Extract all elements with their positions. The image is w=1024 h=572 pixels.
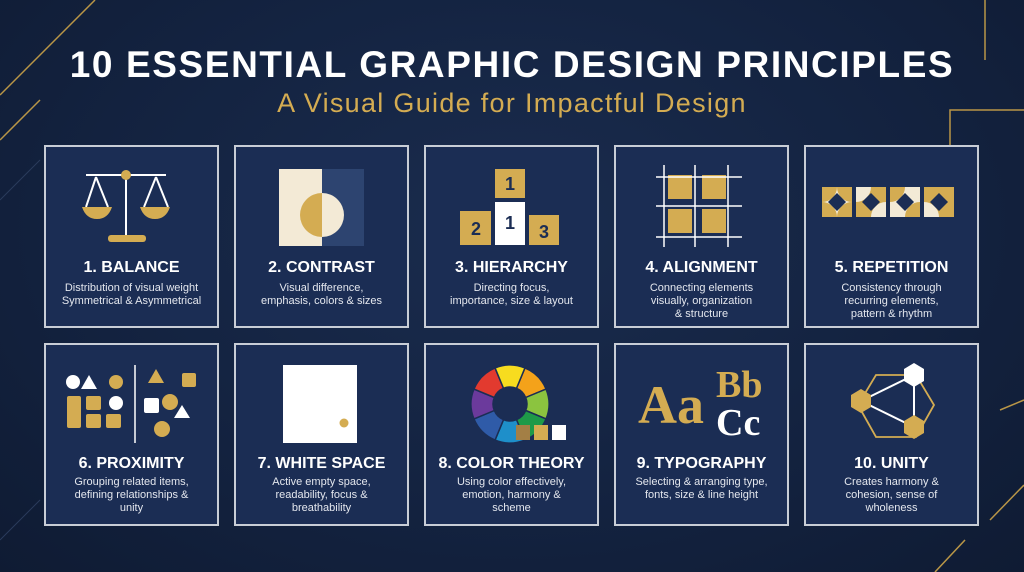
icon: letterforms <box>638 364 762 444</box>
panel: typography: fonts, size & line height <box>645 489 758 501</box>
panel: typography: 9. TYPOGRAPHY <box>637 455 766 472</box>
icon: podium: 1 <box>505 174 515 194</box>
description: Distribution of visual weight <box>65 282 198 294</box>
panel: white space <box>234 343 409 526</box>
icon: letterforms: Aa <box>638 375 704 435</box>
panel: unity: cohesion, sense of <box>846 489 937 501</box>
panel: color theory: emotion, harmony & <box>462 489 561 501</box>
icon: grouped shapes <box>66 365 196 443</box>
icon: grid <box>656 165 742 247</box>
panel: color theory: scheme <box>492 502 531 514</box>
panel: white space: readability, focus & <box>275 489 368 501</box>
panel: typography <box>614 343 789 526</box>
icon: white square <box>283 365 357 443</box>
panel: contrast: 2. CONTRAST <box>268 259 375 276</box>
panel: typography: Selecting & arranging type, <box>635 476 768 488</box>
panel: alignment: 4. ALIGNMENT <box>645 259 758 276</box>
icon: podium: 3 <box>539 222 549 242</box>
icon: podium: 2 <box>471 219 481 239</box>
panel: white space: 7. WHITE SPACE <box>258 455 385 472</box>
icon: podium: 1 <box>505 213 515 233</box>
panel: unity: Creates harmony & <box>844 476 939 488</box>
panel: repetition: Consistency through <box>841 282 942 294</box>
icon: pattern tiles <box>822 187 954 217</box>
icon: podium <box>460 169 559 245</box>
panel: unity: wholeness <box>866 502 917 514</box>
panel: proximity <box>44 343 219 526</box>
panel: repetition: 5. REPETITION <box>835 259 948 276</box>
panel: proximity: unity <box>120 502 143 514</box>
icon: color wheel <box>472 366 566 442</box>
panel: hierarchy <box>424 145 599 328</box>
panel: color theory <box>424 343 599 526</box>
panel: unity: 10. UNITY <box>854 455 929 472</box>
panel: repetition: recurring elements, <box>844 295 939 307</box>
icon: connected hexagons <box>851 363 935 439</box>
panel: balance <box>44 145 219 328</box>
panel: proximity: defining relationships & <box>75 489 188 501</box>
icon: scales <box>82 170 170 242</box>
panel: alignment <box>614 145 789 328</box>
panel: contrast: emphasis, colors & sizes <box>261 295 382 307</box>
panel: unity <box>804 343 979 526</box>
panel: hierarchy: importance, size & layout <box>450 295 573 307</box>
panel: white space: breathability <box>292 502 351 514</box>
description <box>62 282 201 307</box>
panel: color theory: Using color effectively, <box>457 476 566 488</box>
icon: letterforms: Bb <box>716 364 762 406</box>
panel: contrast: Visual difference, <box>280 282 363 294</box>
panel: alignment: visually, organization <box>651 295 752 307</box>
panel: white space: Active empty space, <box>272 476 371 488</box>
panel: repetition <box>804 145 979 328</box>
panel: repetition: pattern & rhythm <box>851 308 932 320</box>
heading: 1. BALANCE <box>83 259 180 276</box>
icon: contrast <box>279 169 364 246</box>
description: Symmetrical & Asymmetrical <box>62 295 201 307</box>
panel: color theory: 8. COLOR THEORY <box>438 455 585 472</box>
title: 10 ESSENTIAL GRAPHIC DESIGN PRINCIPLES <box>70 44 954 85</box>
panel: proximity: Grouping related items, <box>74 476 189 488</box>
panel: contrast <box>234 145 409 328</box>
panel: alignment: & structure <box>675 308 728 320</box>
panel: hierarchy: 3. HIERARCHY <box>455 259 568 276</box>
panel: hierarchy: Directing focus, <box>474 282 549 294</box>
panel: proximity: 6. PROXIMITY <box>79 455 184 472</box>
icon: letterforms: Cc <box>716 402 760 444</box>
panel: alignment: Connecting elements <box>650 282 753 294</box>
subtitle: A Visual Guide for Impactful Design <box>277 88 747 118</box>
